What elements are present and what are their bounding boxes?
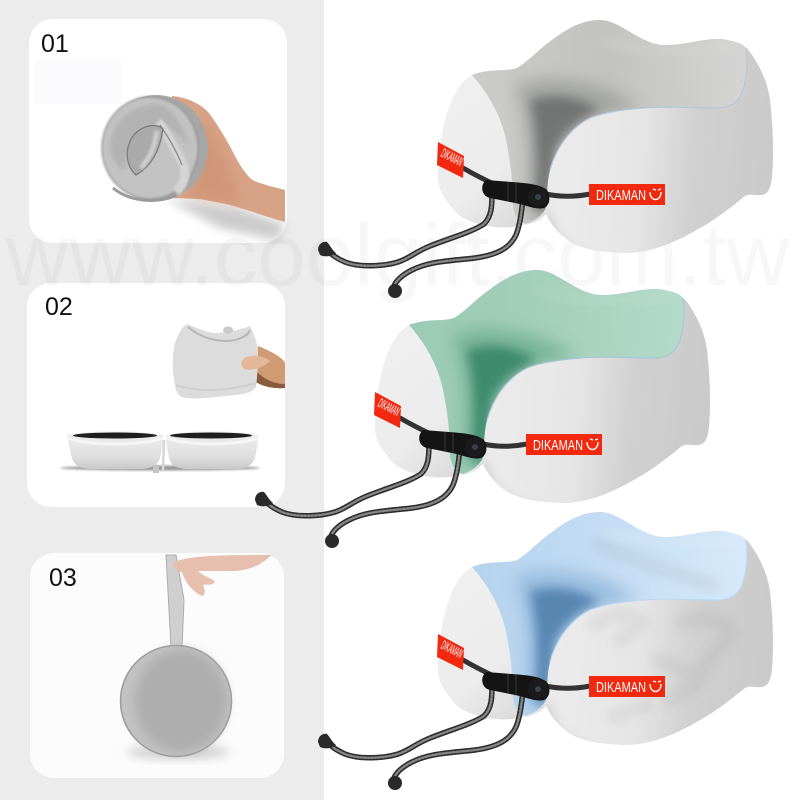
drawstring ropes bbox=[328, 168, 590, 286]
rope end knobs bbox=[318, 242, 402, 298]
seam line bbox=[550, 540, 747, 662]
brand label left bbox=[374, 392, 402, 428]
panel: step 03 bbox=[30, 553, 284, 778]
pillow: grey bbox=[318, 10, 780, 298]
pillow: blue bbox=[318, 502, 780, 790]
brand label right: DIKAMAN bbox=[533, 438, 583, 454]
photo: rolled pillow in hand bbox=[102, 95, 285, 241]
drawstring ropes bbox=[265, 418, 527, 536]
number 02: 02 bbox=[45, 293, 73, 321]
seam line bbox=[550, 48, 747, 170]
drawstring ropes bbox=[328, 660, 590, 778]
card 03 bbox=[30, 553, 284, 778]
pillow body bbox=[438, 39, 773, 253]
rope toggle buckle bbox=[419, 430, 486, 458]
brand label left: DIKAMAN bbox=[375, 397, 402, 420]
card 02 bbox=[27, 283, 285, 507]
brand label right: DIKAMAN bbox=[596, 680, 646, 696]
faint patch bbox=[35, 59, 121, 104]
pillow cover bbox=[409, 270, 684, 474]
photo: pouch hanging from hand bbox=[120, 555, 271, 759]
panel: step 01 bbox=[29, 19, 287, 243]
brand label right bbox=[589, 676, 665, 697]
card 01 bbox=[29, 19, 287, 243]
brand label right bbox=[589, 184, 665, 205]
brand label left bbox=[437, 142, 465, 178]
calligraphy watermark bbox=[596, 545, 732, 716]
brand label left bbox=[437, 634, 465, 670]
pillow body bbox=[375, 289, 710, 503]
pillow body bbox=[438, 531, 773, 745]
brand label left: DIKAMAN bbox=[438, 147, 465, 170]
seam line bbox=[487, 298, 684, 420]
pillow cover bbox=[472, 512, 746, 716]
left grey column bbox=[0, 0, 324, 800]
rope end knobs bbox=[318, 734, 402, 790]
brand label right bbox=[526, 434, 602, 455]
rope end knobs bbox=[255, 492, 339, 548]
pillow cover bbox=[472, 20, 746, 224]
number 03: 03 bbox=[49, 564, 77, 592]
photo: pillow pressed by hand bbox=[173, 324, 285, 398]
photo: open carrying case bbox=[60, 431, 260, 473]
rope toggle buckle bbox=[482, 180, 549, 208]
panel: step 02 bbox=[27, 283, 285, 507]
rope toggle buckle bbox=[482, 672, 549, 700]
pillow: green bbox=[255, 260, 717, 548]
number 01: 01 bbox=[41, 30, 69, 58]
watermark text: www.coolgift.com.tw bbox=[5, 207, 790, 304]
brand label left: DIKAMAN bbox=[438, 639, 465, 662]
brand label right: DIKAMAN bbox=[596, 188, 646, 204]
